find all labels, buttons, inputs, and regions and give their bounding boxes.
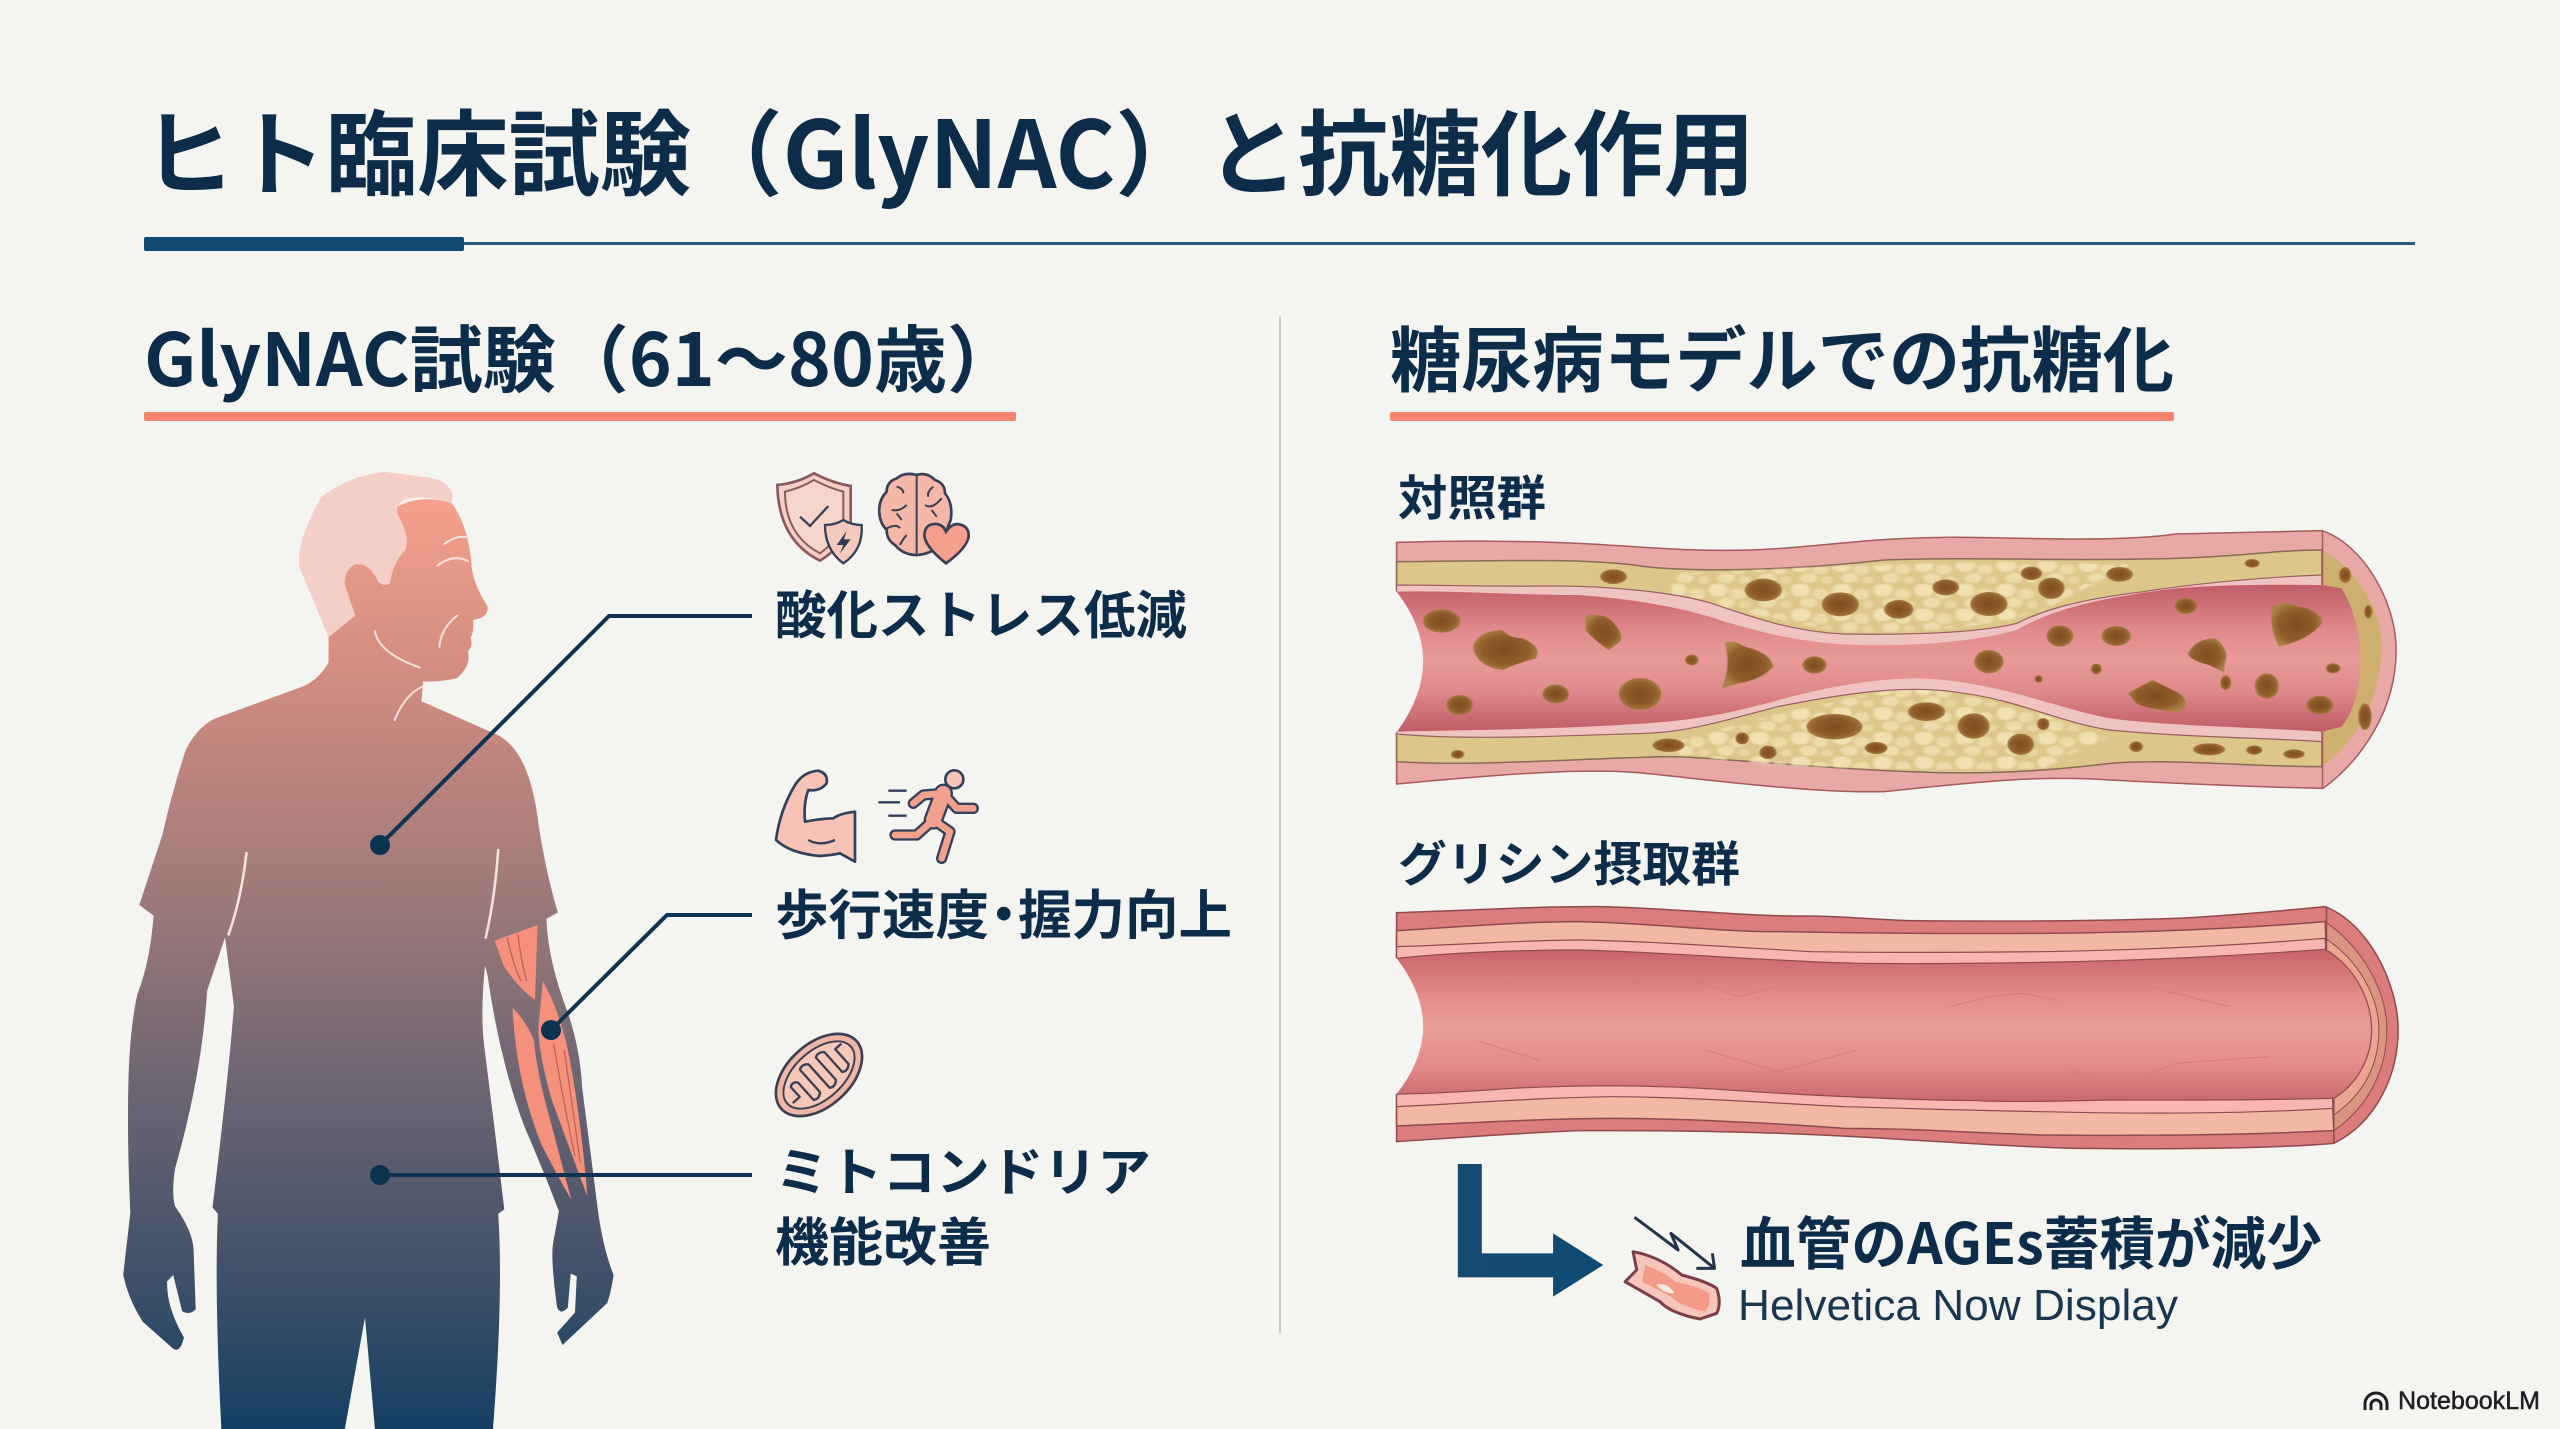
icon: runner bbox=[878, 770, 973, 858]
icon: mitochondrion bbox=[760, 1018, 878, 1132]
title rule bbox=[144, 237, 2415, 251]
NotebookLM mark: NotebookLM bbox=[2398, 1387, 2540, 1415]
label: walking speed and grip: ・ bbox=[977, 873, 1030, 950]
lesions bbox=[1423, 559, 2372, 759]
label: walking speed and grip: 握力向上 bbox=[1018, 873, 1232, 950]
arrow bbox=[1458, 1164, 1603, 1297]
heading: diabetes model: 糖尿病モデルでの抗糖化 bbox=[1390, 305, 2174, 407]
connector: oxidative stress bbox=[370, 616, 752, 855]
divider bbox=[1279, 316, 1281, 1333]
connector: walking speed and grip bbox=[541, 915, 752, 1040]
label: walking speed and grip: 歩行速度 bbox=[775, 873, 989, 950]
result text: Helvetica Now Display bbox=[1738, 1281, 2178, 1330]
panel: GlyNAC trial bbox=[123, 302, 1232, 1429]
label: mitochondrial function: ミトコンドリア bbox=[775, 1131, 1151, 1206]
heading: GlyNAC trial: GlyNAC試験（61〜80歳） bbox=[144, 302, 1020, 408]
title: ヒト臨床試験（GlyNAC）と抗糖化作用 bbox=[143, 80, 1755, 215]
label: mitochondrial function: 機能改善 bbox=[775, 1201, 991, 1276]
illustration: artery with plaque bbox=[1390, 531, 2396, 792]
label: oxidative stress: 酸化ストレス低減 bbox=[775, 574, 1187, 649]
label: glycine group: グリシン摂取群 bbox=[1398, 825, 1740, 895]
label: mitochondrial function bbox=[775, 1131, 1151, 1276]
connector: mitochondria bbox=[370, 1165, 752, 1185]
icon: flexed arm bbox=[776, 771, 855, 862]
result text: 血管のAGEs蓄積が減少 bbox=[1740, 1199, 2322, 1281]
icon: vessel with falling arrow bbox=[1625, 1217, 1719, 1319]
icon: brain and heart bbox=[879, 474, 969, 563]
illustration: healthy artery bbox=[1390, 907, 2398, 1149]
icon: shields bbox=[777, 473, 862, 563]
panel: diabetes model bbox=[1390, 305, 2398, 1330]
human body silhouette bbox=[123, 472, 614, 1429]
label: control group: 対照群 bbox=[1398, 459, 1546, 529]
result text bbox=[1738, 1199, 2322, 1330]
